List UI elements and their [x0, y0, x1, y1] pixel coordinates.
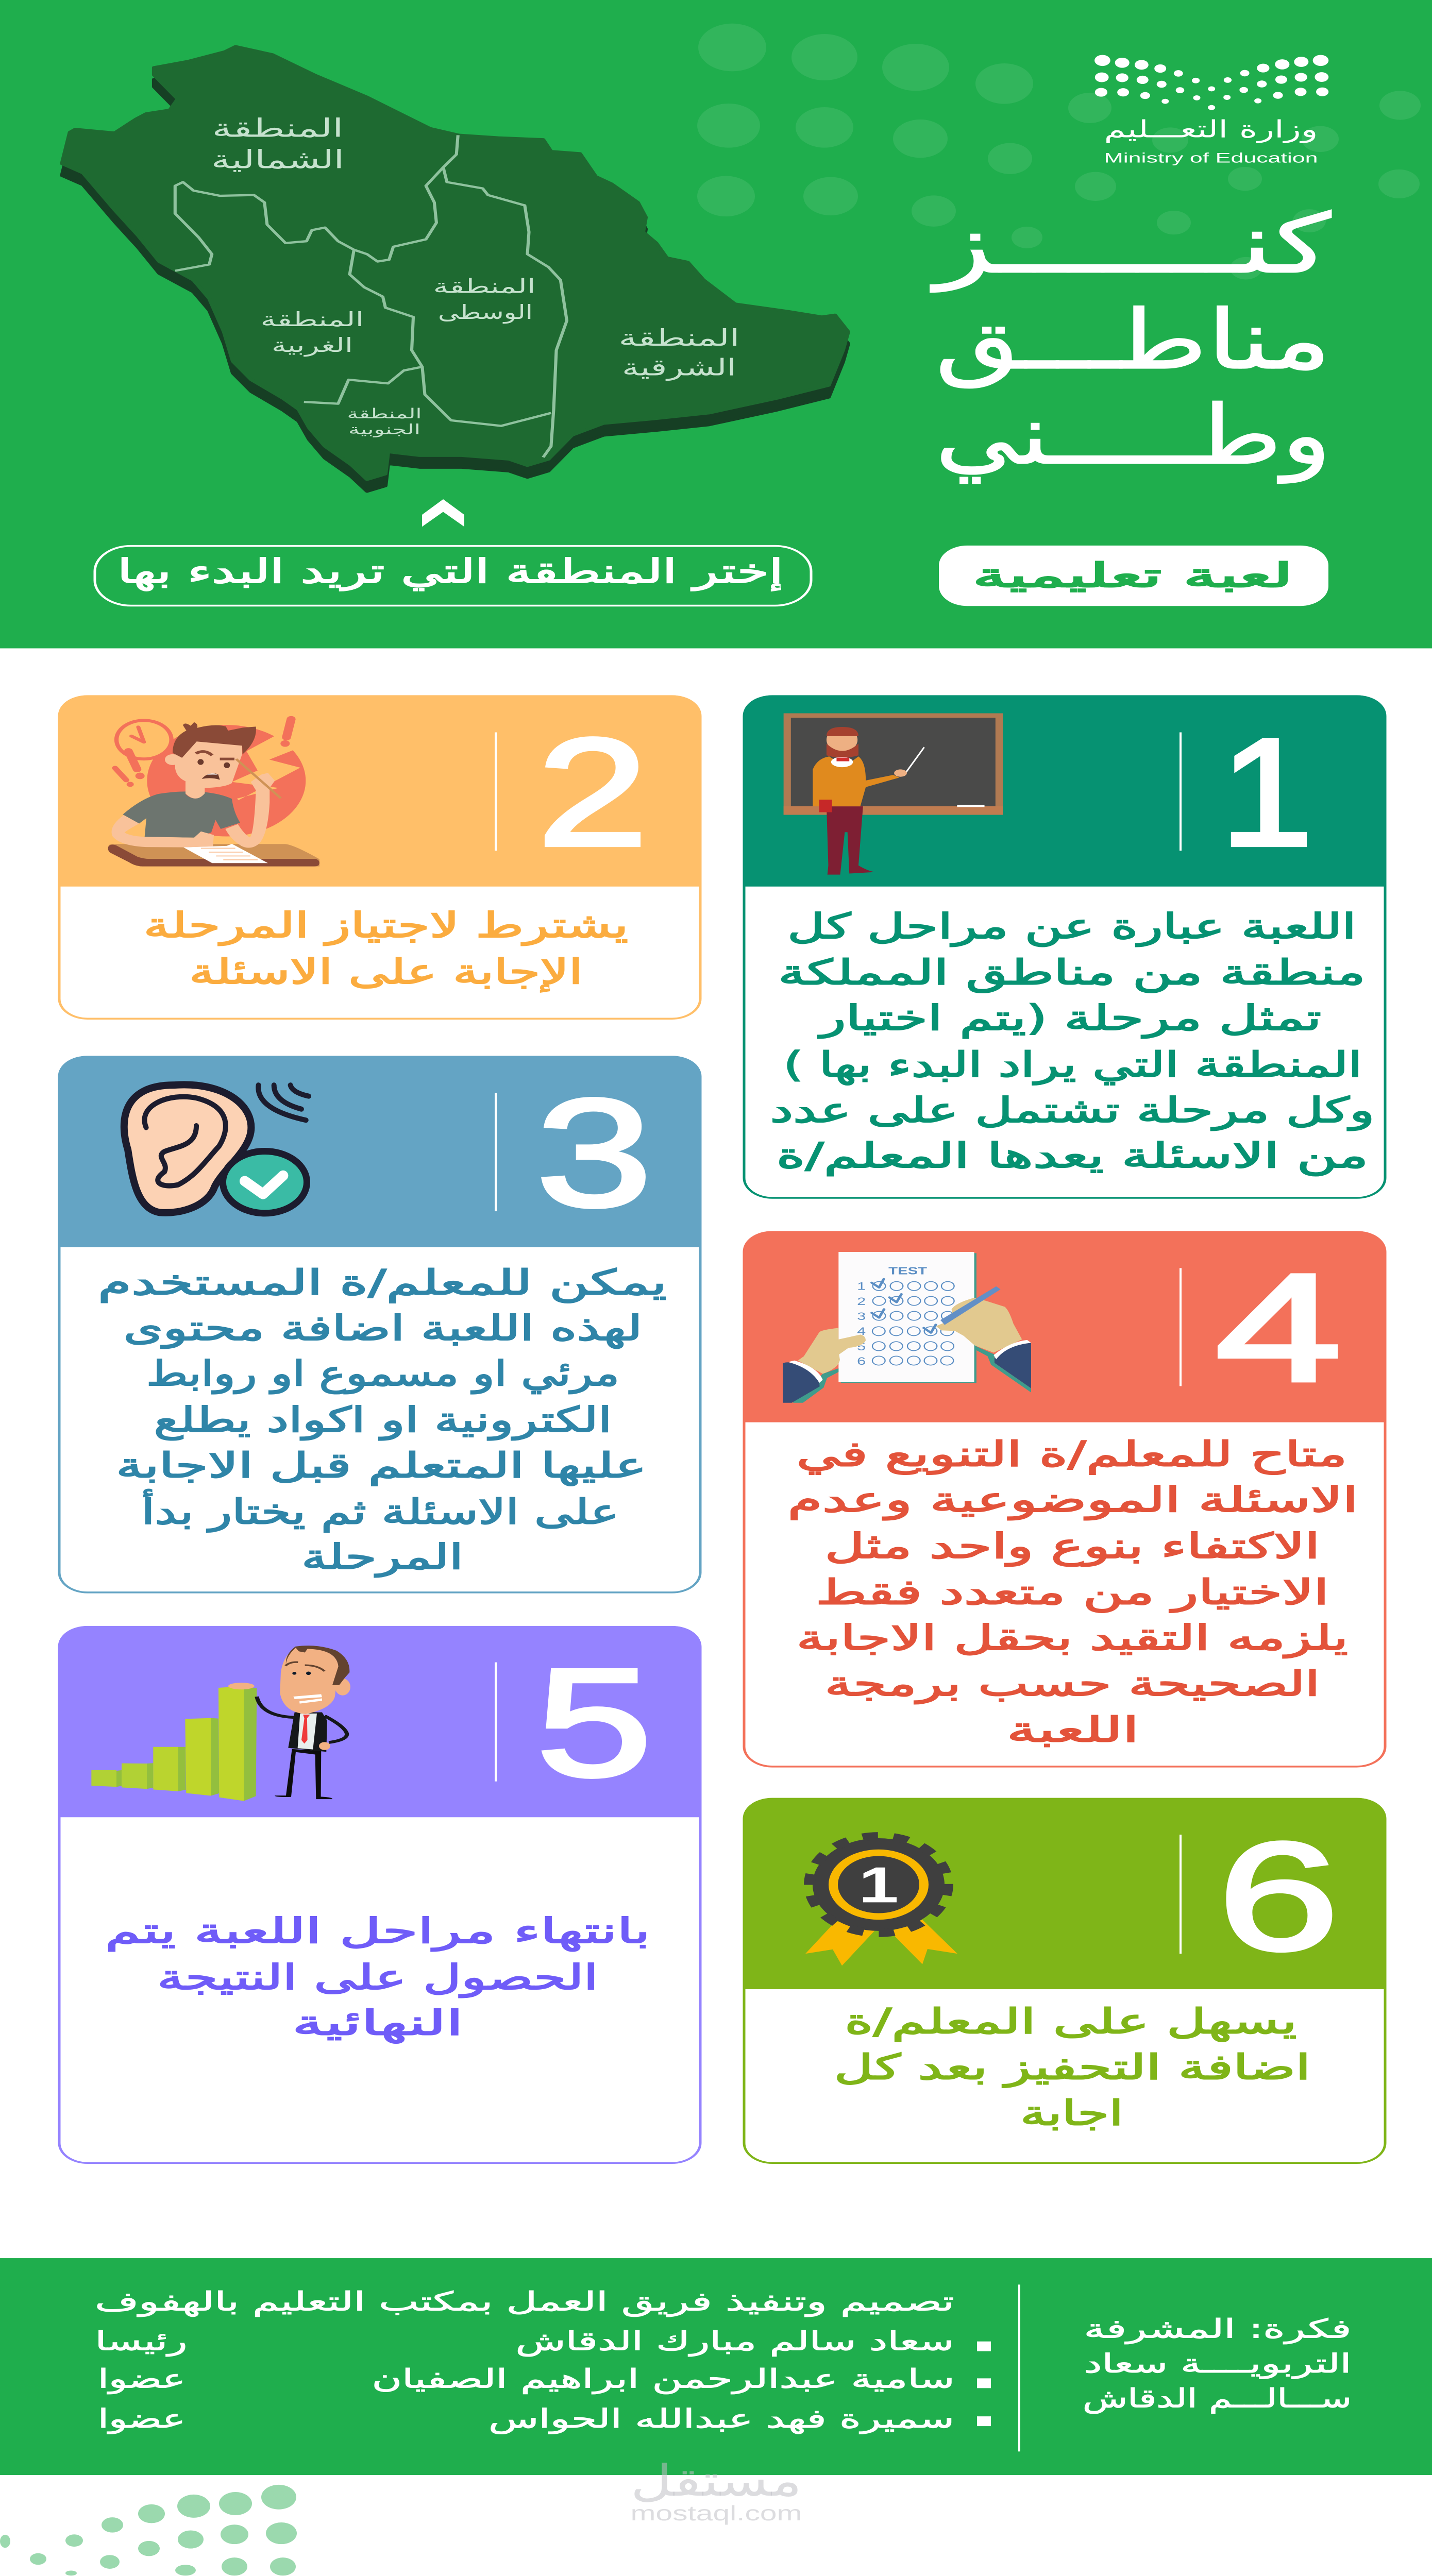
watermark: mostaql: mostaql.com [631, 2501, 802, 2525]
icon: ear with check mark [124, 1084, 309, 1213]
team list: عضوا [98, 2403, 186, 2434]
card header 2 [58, 696, 701, 887]
text block 1: وكل مرحلة تشتمل على عدد [770, 1090, 1375, 1131]
icon: stressed student [108, 719, 319, 867]
watermark: mostaql [631, 2456, 802, 2525]
team list: سميرة فهد عبدالله الحواس [488, 2403, 954, 2434]
team list: سعاد سالم مبارك الدقاش [515, 2326, 954, 2357]
label: southern region [347, 406, 422, 437]
text block 6: اجابة [1020, 2093, 1123, 2133]
divider 5 [495, 1663, 497, 1782]
text block 4: الصحيحة حسب برمجة [825, 1664, 1320, 1704]
watermark: mostaql: مستقل [631, 2456, 802, 2506]
text block 3: يمكن للمعلم/ة المستخدم [98, 1262, 667, 1303]
text block 3: المرحلة [301, 1537, 463, 1578]
label: central region: الوسطى [438, 301, 533, 324]
badge: educational game: لعبة تعليمية [972, 556, 1292, 595]
text block 3: مرئي او مسموع او روابط [146, 1353, 619, 1394]
icon: test paper with hands: TEST [888, 1265, 928, 1277]
icon: test paper with hands: 3 [857, 1310, 866, 1323]
text block 6: يسهل على المعلم/ة [845, 2001, 1297, 2042]
text block 1: تمثل مرحلة (يتم اختيار [817, 997, 1321, 1039]
team list [95, 2326, 991, 2434]
text block 5: بانتهاء مراحل اللعبة يتم [105, 1910, 650, 1952]
text block 3: الكترونية او اكواد يطلع [154, 1399, 612, 1440]
label: eastern region: المنطقة [619, 325, 740, 351]
panel: header [0, 0, 1432, 648]
card header 5 [58, 1626, 701, 1817]
label: eastern region: الشرقية [622, 354, 736, 381]
divider 2 [495, 732, 497, 851]
decorative background dots [697, 24, 1421, 279]
text block 6: اضافة التحفيز بعد كل [834, 2047, 1311, 2088]
number 3: 3 [536, 1067, 652, 1239]
card header 3 [58, 1056, 701, 1247]
text block 1: من الاسئلة يعدها المعلم/ة [776, 1135, 1368, 1176]
label: northern region: المنطقة [212, 114, 344, 143]
label: southern region: الجنوبية [348, 421, 420, 437]
panel: card 6 [743, 1798, 1386, 2163]
icon: Ministry of Education logo: وزارة التعـــليم [1104, 115, 1318, 143]
label: western region [260, 309, 364, 357]
text block 3: عليها المتعلم قبل الاجابة [116, 1445, 647, 1486]
icon: test paper with hands: 6 [857, 1354, 866, 1367]
icon: Ministry of Education logo: Ministry of Education [1104, 150, 1318, 165]
label: central region: المنطقة [433, 275, 536, 298]
text block 5: النهائية [292, 2003, 463, 2043]
icon: map of Saudi Arabia [62, 46, 848, 492]
team list: رئيسا [95, 2326, 188, 2357]
text block 1: المنطقة التي يراد البدء بها ) [784, 1044, 1362, 1086]
label: western region: المنطقة [260, 309, 364, 331]
text: idea credit: ســـالـــم الدقاش [1083, 2383, 1352, 2414]
number 4: 4 [1215, 1242, 1342, 1413]
panel: card 3 [58, 1056, 701, 1592]
icon: first place medal: 1 [858, 1856, 899, 1913]
panel: card 4 [743, 1231, 1386, 1767]
text block 2: يشترط لاجتياز المرحلة [143, 905, 628, 946]
text block 4 [787, 1434, 1358, 1750]
icon: test paper with hands [783, 1252, 1031, 1403]
label: northern region: الشمالية [211, 145, 344, 175]
text block 3 [98, 1262, 667, 1578]
text block 2 [143, 905, 628, 992]
card header 6 [743, 1798, 1386, 1989]
panel: card 2 [58, 696, 701, 1019]
divider 3 [495, 1093, 497, 1211]
label: southern region: المنطقة [347, 406, 422, 422]
callout: choose region [95, 546, 811, 606]
label: western region: الغربية [272, 334, 353, 357]
icon: test paper with hands: 1 [857, 1280, 866, 1293]
panel: card 1 [743, 696, 1386, 1198]
title: وطـــــني [935, 388, 1331, 483]
divider 4 [1180, 1268, 1182, 1386]
callout: choose region: إختر المنطقة التي تريد البدء بها [117, 552, 783, 591]
title: مناطـــق [935, 293, 1331, 388]
card header 4 [743, 1231, 1386, 1422]
text: design team heading: تصميم وتنفيذ فريق العمل بمكتب التعليم بالهفوف [95, 2286, 954, 2317]
number 1: 1 [1220, 706, 1313, 878]
icon: test paper with hands: 5 [857, 1340, 866, 1353]
text block 1: اللعبة عبارة عن مراحل كل [787, 906, 1356, 947]
decorative logo dots bottom left [0, 2485, 297, 2575]
team list: عضوا [98, 2363, 186, 2394]
number 5: 5 [536, 1637, 652, 1808]
card header 1 [743, 696, 1386, 887]
text block 4: اللعبة [1007, 1709, 1139, 1750]
label: eastern region [619, 325, 740, 381]
icon: test paper with hands: 2 [857, 1295, 866, 1308]
badge: educational game [939, 546, 1328, 606]
title: كنـــــــز [930, 197, 1331, 292]
text block 1: منطقة من مناطق المملكة [778, 952, 1366, 993]
text: idea credit: فكرة: المشرفة [1084, 2314, 1351, 2344]
label: central region [433, 275, 536, 324]
icon: businessman with growth bars [91, 1646, 350, 1801]
arrow: chevron up [422, 499, 464, 527]
text block 4: متاح للمعلم/ة التنويع في [797, 1434, 1347, 1475]
text block 2: الإجابة على الاسئلة [189, 951, 583, 992]
text block 4: الاسئلة الموضوعية وعدم [787, 1480, 1358, 1520]
text block 4: الاختيار من متعدد فقط [816, 1572, 1329, 1613]
label: northern region [211, 114, 344, 175]
icon: test paper with hands: 4 [857, 1325, 866, 1337]
text: idea credit: التربويــــة سعاد [1084, 2348, 1351, 2379]
icon: Ministry of Education logo [1094, 55, 1328, 165]
text block 5: الحصول على النتيجة [157, 1957, 598, 1998]
panel: footer credits [0, 2258, 1432, 2475]
text block 3: لهذه اللعبة اضافة محتوى [123, 1308, 643, 1349]
text block 4: الاكتفاء بنوع واحد مثل [825, 1526, 1320, 1567]
divider 1 [1180, 732, 1182, 851]
text block 6 [834, 2001, 1311, 2133]
text block 5 [105, 1910, 650, 2043]
divider 6 [1180, 1835, 1182, 1954]
number 6: 6 [1218, 1810, 1339, 1982]
number 2: 2 [537, 706, 648, 878]
divider [1018, 2284, 1020, 2451]
icon: first place medal [805, 1836, 957, 1965]
text block 1 [770, 906, 1375, 1176]
text block 4: يلزمه التقيد بحقل الاجابة [796, 1617, 1348, 1658]
panel: card 5 [58, 1626, 701, 2163]
icon: teacher at blackboard [784, 713, 1003, 875]
team list: سامية عبدالرحمن ابراهيم الصفيان [372, 2363, 954, 2394]
title [930, 197, 1331, 483]
text block 3: على الاسئلة ثم يختار بدأ [141, 1489, 619, 1532]
text: idea credit [1083, 2314, 1352, 2414]
